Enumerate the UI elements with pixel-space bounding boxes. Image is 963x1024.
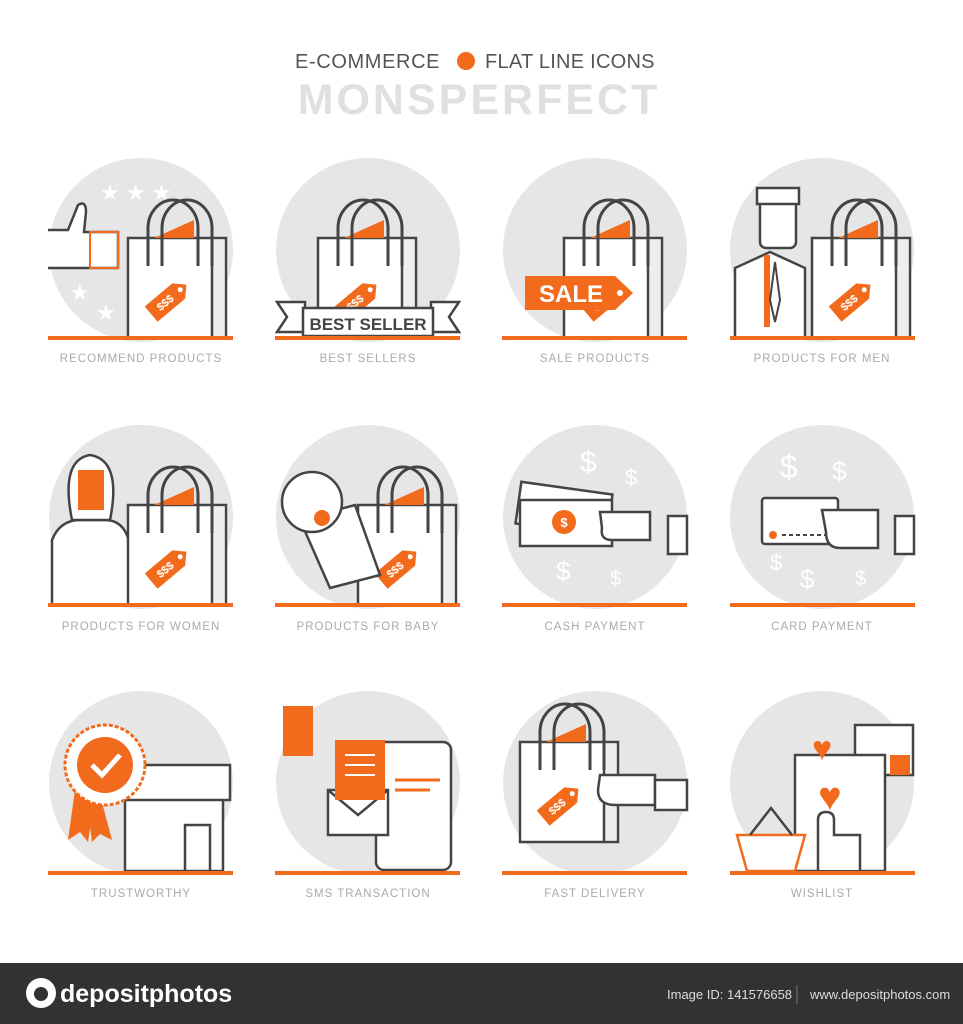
icon: sms transaction: SMS TRANSACTION — [305, 888, 431, 900]
footer bar: Image ID: 141576658 — [667, 987, 792, 1002]
icon: best sellers: BEST SELLERS — [320, 353, 416, 365]
icon: cash payment: $ — [625, 465, 637, 490]
footer bar — [0, 963, 963, 1024]
footer bar: depositphotos — [60, 980, 232, 1008]
icon: sale products: SALE PRODUCTS — [540, 353, 650, 365]
icon: fast delivery — [502, 691, 687, 900]
header: FLAT LINE ICONS — [485, 51, 655, 73]
icon: products for women: PRODUCTS FOR WOMEN — [62, 621, 220, 633]
icon: card payment — [730, 425, 915, 633]
icon: recommend products: ★ — [70, 280, 90, 305]
icon: fast delivery: FAST DELIVERY — [544, 888, 646, 900]
icon: wishlist — [730, 691, 915, 900]
icon: wishlist: WISHLIST — [791, 888, 853, 900]
icon: products for baby — [275, 425, 460, 633]
header: E-COMMERCE — [295, 51, 440, 73]
icon: wishlist: ♥ — [818, 775, 842, 819]
icon: card payment: $ — [770, 550, 782, 575]
icon: products for baby: PRODUCTS FOR BABY — [297, 621, 439, 633]
icon: sale products — [502, 158, 687, 365]
icon: recommend products: ★ — [96, 300, 116, 325]
icon: card payment: $ — [780, 449, 798, 485]
icon: trustworthy — [48, 691, 233, 900]
icon: cash payment: $ — [580, 446, 597, 479]
icon: sms transaction — [275, 691, 460, 900]
icon: cash payment: $ — [610, 568, 621, 590]
icon: card payment: $ — [800, 564, 815, 594]
icon: trustworthy: TRUSTWORTHY — [91, 888, 191, 900]
icon: sale products: SALE — [539, 281, 603, 308]
icon: cash payment: $ — [560, 515, 568, 530]
icon: card payment: $ — [832, 456, 847, 486]
icon: recommend products — [48, 158, 233, 365]
icon: best sellers — [275, 158, 460, 365]
icon: cash payment: $ — [556, 556, 571, 586]
icon: best sellers: BEST SELLER — [309, 315, 427, 334]
icon: products for men: PRODUCTS FOR MEN — [754, 353, 890, 365]
icon: cash payment — [502, 425, 687, 633]
header — [295, 51, 660, 124]
icon: recommend products: RECOMMEND PRODUCTS — [60, 353, 222, 365]
icon: card payment: $ — [855, 568, 866, 590]
icon: recommend products: ★ ★ ★ — [100, 180, 171, 205]
icon: card payment: CARD PAYMENT — [771, 621, 873, 633]
header: MONSPERFECT — [298, 76, 660, 124]
icon: products for men — [730, 158, 915, 365]
icon: cash payment: CASH PAYMENT — [544, 621, 646, 633]
footer bar: www.depositphotos.com — [809, 987, 950, 1002]
icon: wishlist: ♥ — [812, 730, 832, 768]
icon: products for women — [48, 425, 233, 633]
